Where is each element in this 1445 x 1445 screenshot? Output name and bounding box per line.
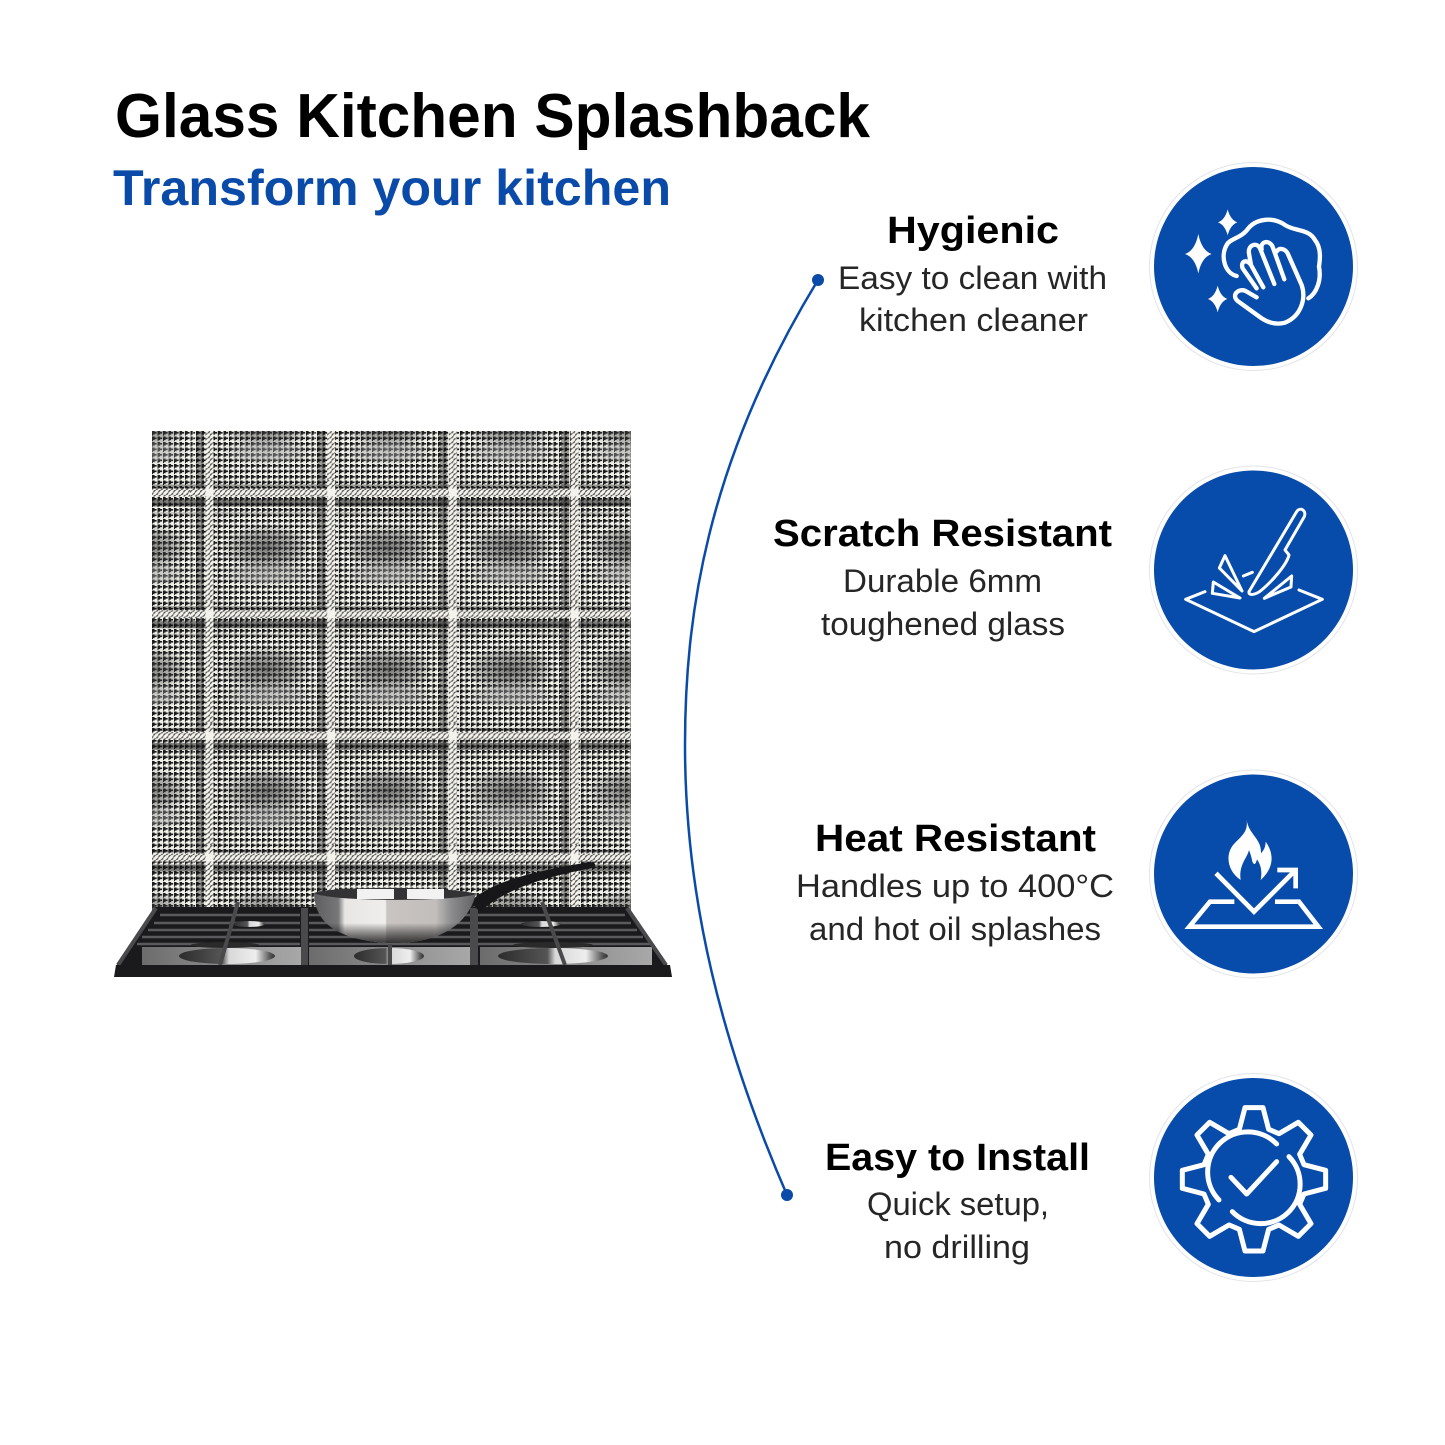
description — [821, 563, 1065, 642]
feature: hygienic — [838, 210, 1107, 338]
description: Handles up to 400°C — [796, 868, 1114, 904]
feature: scratch resistant — [773, 513, 1112, 642]
description: Quick setup, — [867, 1186, 1049, 1222]
title: Glass Kitchen Splashback — [115, 82, 870, 151]
icon: knife on glass — [1150, 466, 1358, 674]
icon: flame on surface — [1150, 770, 1358, 978]
icon: gear with check — [1150, 1074, 1358, 1282]
description: toughened glass — [821, 606, 1065, 642]
description — [796, 868, 1114, 947]
heading: Easy to Install — [825, 1137, 1090, 1179]
description: kitchen cleaner — [859, 302, 1088, 338]
description: Easy to clean with — [838, 260, 1107, 296]
feature: easy to install — [825, 1137, 1090, 1265]
description — [838, 260, 1107, 338]
connector curve — [685, 274, 824, 1201]
description: and hot oil splashes — [809, 911, 1101, 947]
heading: Hygienic — [887, 210, 1059, 252]
heading: Scratch Resistant — [773, 513, 1112, 555]
gas hob — [114, 902, 672, 977]
description: no drilling — [884, 1229, 1030, 1265]
description: Durable 6mm — [843, 563, 1042, 599]
subtitle: Transform your kitchen — [113, 160, 671, 216]
feature: heat resistant — [796, 818, 1114, 947]
icon: cleaning hand — [1150, 162, 1358, 370]
product image: splashback above hob — [114, 431, 672, 977]
heading: Heat Resistant — [815, 818, 1096, 860]
frying pan — [314, 862, 595, 943]
description — [867, 1186, 1049, 1265]
plaid glass panel — [152, 431, 631, 911]
